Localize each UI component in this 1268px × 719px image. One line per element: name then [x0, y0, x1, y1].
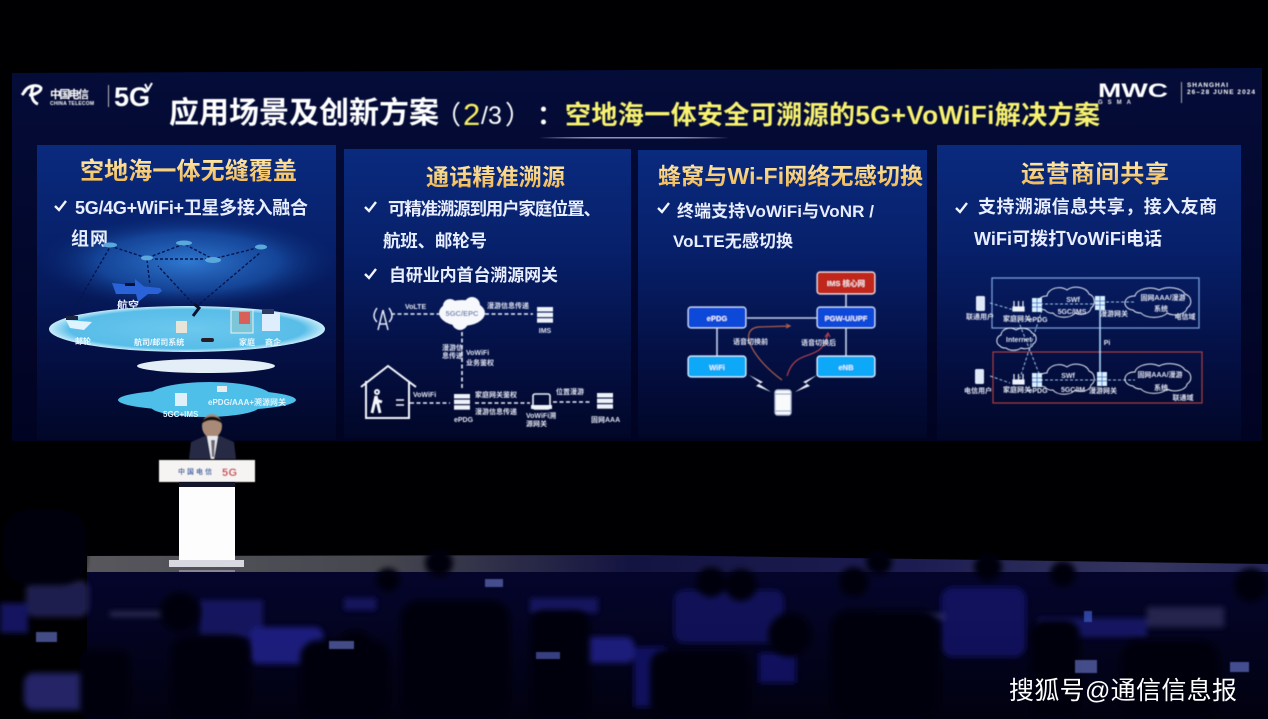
suit	[189, 436, 236, 459]
domain box: telecom	[992, 278, 1199, 328]
title: （	[435, 100, 461, 130]
bullets: 支持溯源信息共享，接入友商	[978, 196, 1217, 217]
icon: gateway top	[1095, 296, 1105, 310]
internet cloud	[137, 359, 275, 373]
box: eNB	[817, 356, 875, 377]
diagram labels: 电信用户	[964, 386, 992, 395]
icon: server bottom ePDG	[1032, 373, 1042, 387]
box: WiFi: WiFi	[709, 363, 725, 372]
podium body	[179, 487, 235, 560]
logo: MWC Shanghai: 26–28 JUNE 2024	[1187, 89, 1255, 96]
diagram labels: 固网AAA	[591, 416, 620, 424]
icon: phone top	[976, 296, 985, 311]
divider rule under title	[539, 137, 729, 138]
diagram labels: 固网AAA/漫游	[1137, 370, 1183, 379]
logo: China Telecom: 5G	[114, 82, 150, 112]
icon: phone bottom	[975, 369, 984, 384]
icon: router top	[1013, 301, 1024, 311]
diagram labels: SWf	[1061, 373, 1075, 380]
icon: AAA server	[597, 393, 613, 409]
sharing diagram	[964, 278, 1202, 403]
domain box: unicom	[993, 352, 1202, 403]
diagram labels: 漫游网关	[1100, 309, 1128, 318]
heading: 通话精准溯源	[426, 164, 565, 190]
cloud: SWf 5GC/IMS bottom	[1038, 364, 1094, 394]
ground ellipse	[49, 306, 325, 352]
seat backs	[0, 580, 1224, 710]
podium	[159, 460, 255, 572]
bullets: 可精准溯源到用户家庭位置、	[388, 199, 601, 219]
box: PGW-U/UPF: PGW-U/UPF	[825, 314, 868, 323]
ground icons and labels: 航司/邮司系统	[134, 337, 184, 347]
label: before handover: 语音切换前	[733, 337, 768, 346]
cloud: AAA bottom	[1125, 364, 1191, 393]
ground icons and labels	[66, 304, 281, 347]
diagram labels: ePDG	[1028, 317, 1048, 324]
logo: MWC Shanghai: SHANGHAI	[1187, 82, 1228, 89]
podium sign	[159, 460, 255, 482]
arrow: before handover	[749, 324, 790, 380]
panel: seamless handover	[638, 150, 927, 438]
diagram labels: ePDG	[454, 417, 474, 424]
icon: lightning right	[795, 375, 817, 392]
icon: airplane	[112, 279, 162, 302]
diagram labels: IMS	[539, 328, 552, 335]
title: ：	[537, 100, 563, 130]
icon: gateway	[531, 394, 552, 409]
presentation screen	[12, 68, 1262, 441]
podium base	[169, 560, 244, 567]
handover diagram	[688, 272, 875, 415]
diagram labels: 息传递	[442, 351, 463, 360]
podium sign: 中国电信	[178, 467, 212, 476]
box: IMS core	[817, 272, 875, 294]
diagram labels: VoLTE	[405, 304, 426, 311]
diagram labels: 电信域	[1174, 312, 1196, 321]
bullets	[956, 196, 1217, 249]
sky glow	[38, 214, 338, 310]
label: aviation: 航空	[117, 298, 139, 312]
diagram labels: Pi	[1104, 340, 1110, 347]
logo: China Telecom	[22, 82, 152, 112]
diagram labels: 固网AAA/漫游	[1140, 293, 1186, 302]
icon: house with person	[361, 366, 416, 418]
diagram labels: 家庭网关	[1003, 314, 1031, 323]
phone screens held up	[36, 579, 1249, 673]
cloud: SWf 5GC/IMS top	[1038, 287, 1094, 317]
icon: lightning left	[749, 375, 771, 392]
icon: antenna	[374, 308, 392, 330]
bullets	[658, 201, 874, 251]
audience	[0, 510, 1268, 719]
title	[169, 97, 1100, 132]
bullets: WiFi可拨打VoWiFi电话	[974, 229, 1162, 249]
Pi link	[1099, 310, 1101, 372]
core network cloud	[118, 382, 296, 419]
box: WiFi	[688, 356, 746, 377]
diagram labels: 漫游信息传递	[475, 407, 517, 416]
diagram labels: VoWiFi	[466, 350, 489, 357]
panel: operator sharing	[937, 145, 1241, 440]
diagram labels: 位置漫游	[556, 387, 584, 396]
podium foot	[179, 570, 235, 572]
shirt and tie	[207, 436, 218, 459]
title: 2	[463, 97, 480, 132]
title: 应用场景及创新方案	[169, 97, 439, 130]
bullets: 航班、邮轮号	[383, 231, 487, 251]
diagram labels: 系统	[1154, 383, 1168, 392]
bullets	[365, 199, 601, 285]
bullets: 自研业内首台溯源网关	[389, 265, 558, 285]
core network cloud: 5GC+IMS	[163, 410, 199, 419]
box: PGW-U/UPF	[817, 307, 875, 328]
diagram labels	[405, 301, 620, 428]
title: ）	[505, 100, 531, 130]
bullet text: 5G/4G+WiFi+卫星多接入融合	[75, 197, 308, 218]
diagram labels	[964, 293, 1196, 402]
heading: 运营商间共享	[1021, 161, 1169, 188]
label: after handover: 语音切换后	[801, 338, 836, 347]
diagram labels: 5GC/IMS	[1058, 309, 1087, 316]
ground icons and labels: 商企	[265, 337, 281, 347]
panel: call tracing	[344, 149, 631, 438]
connection lines	[990, 302, 1135, 383]
cloud: Internet: Internet	[1006, 337, 1032, 344]
diagram labels: 联通用户	[966, 312, 994, 321]
check mark	[55, 201, 66, 210]
cloud: AAA top	[1125, 288, 1191, 317]
diagram labels: 家庭网关鉴权	[475, 390, 517, 399]
diagram labels: 源网关	[526, 419, 547, 428]
ground icons and labels: 邮轮	[75, 336, 91, 346]
icon: gateway bottom	[1097, 372, 1107, 386]
icon: server top ePDG	[1032, 298, 1042, 312]
5GC/EPC cloud	[439, 297, 485, 330]
title: 空地海一体安全可溯源的5G+VoWiFi解决方案	[565, 100, 1100, 130]
box: ePDG	[688, 307, 746, 328]
logo: MWC Shanghai	[1098, 81, 1255, 106]
dashed links	[391, 314, 592, 403]
box: IMS core: IMS 核心网	[827, 278, 865, 288]
cloud: Internet	[997, 328, 1036, 350]
diagram labels: 5GC/IM	[1061, 387, 1085, 394]
diagram labels: 漫游网关	[1089, 386, 1117, 395]
podium sign: 5G	[222, 467, 237, 479]
bullets: 终端支持VoWiFi与VoNR /	[677, 201, 874, 221]
icon: IMS server	[537, 307, 553, 323]
stage edge	[87, 555, 1268, 579]
heading: 蜂窝与Wi-Fi网络无感切换	[658, 163, 923, 189]
box: ePDG: ePDG	[707, 314, 727, 323]
logo: China Telecom: CHINA TELECOM	[50, 101, 94, 107]
logo: MWC Shanghai: GSMA	[1098, 100, 1132, 106]
5GC/EPC cloud: 5GC/EPC	[446, 309, 479, 318]
diagram labels: 漫游信息传递	[487, 301, 529, 310]
logo: MWC Shanghai: MWC	[1098, 81, 1168, 102]
diagram labels: ePDG	[1028, 388, 1048, 395]
arrow: after handover	[787, 333, 830, 376]
diagram labels: 家庭网关	[1003, 385, 1031, 394]
box: eNB: eNB	[838, 363, 854, 372]
links	[717, 294, 846, 356]
panel: seamless coverage	[37, 145, 338, 440]
speaker	[189, 414, 236, 459]
diagram labels: VoWiFi	[413, 392, 436, 399]
title: /3	[481, 102, 502, 130]
tracing diagram	[361, 297, 620, 428]
diagram labels: 联通域	[1172, 393, 1194, 402]
diagram labels: 业务鉴权	[466, 358, 494, 367]
icon: phone	[775, 390, 791, 415]
continuation text: 组网	[71, 229, 108, 249]
icon: ePDG server	[454, 394, 470, 410]
diagram labels: SWf	[1066, 297, 1080, 304]
podium neck	[179, 482, 235, 487]
diagram labels: 系统	[1154, 304, 1168, 313]
core network cloud: ePDG/AAA+溯源网关	[208, 397, 286, 407]
silhouettes of heads	[4, 510, 1268, 719]
icon: router bottom	[1013, 374, 1024, 384]
satellite network	[70, 240, 267, 316]
heading: 空地海一体无缝覆盖	[80, 158, 297, 185]
bullets: VoLTE无感切换	[673, 231, 793, 251]
head	[202, 414, 222, 438]
watermark: 搜狐号@通信信息报	[1009, 677, 1237, 705]
diagram labels: 漫游信	[442, 343, 463, 352]
logo: China Telecom: 中国电信	[50, 87, 89, 101]
ground icons and labels: 家庭	[239, 337, 255, 347]
audience floor	[87, 572, 1268, 719]
diagram labels: VoWiFi溯	[526, 411, 556, 420]
